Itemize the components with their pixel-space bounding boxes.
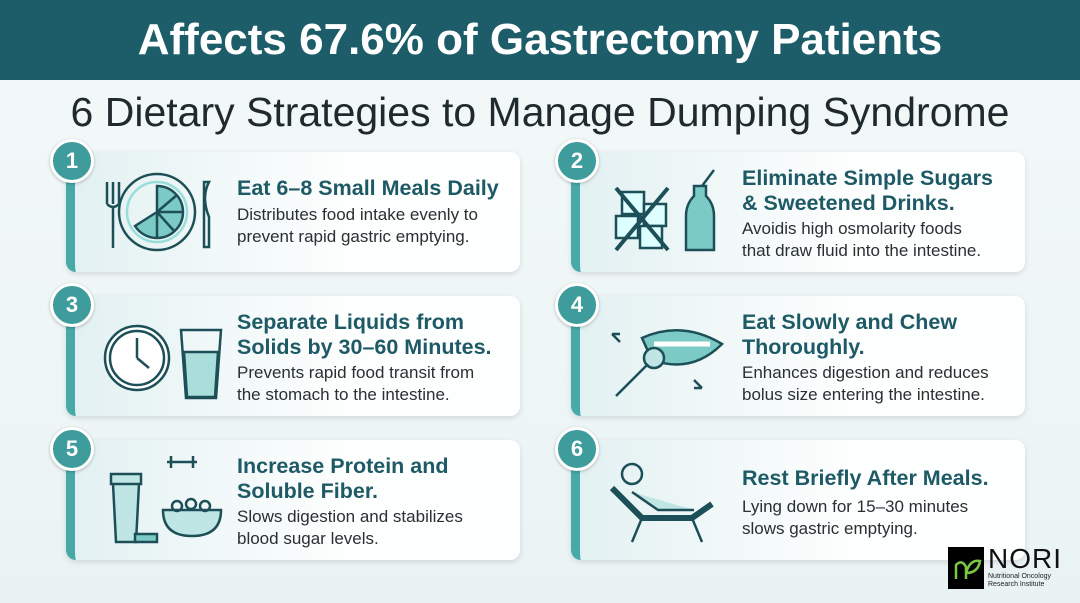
title: Eat Slowly and Chew <box>742 310 957 334</box>
icon: mouth chewing <box>611 329 724 397</box>
title: Increase Protein and <box>237 454 448 478</box>
body <box>237 205 478 246</box>
panel: card 1 <box>66 152 520 272</box>
logo: NORI: Nutritional Oncology <box>988 573 1051 580</box>
number 3: 3 <box>66 292 78 317</box>
body <box>742 219 981 260</box>
logo: NORI: NORI <box>988 543 1062 574</box>
panel: card 2 <box>571 152 1025 272</box>
body: the stomach to the intestine. <box>237 385 450 404</box>
body: that draw fluid into the intestine. <box>742 241 981 260</box>
body: Enhances digestion and reduces <box>742 363 989 382</box>
panel: card 4 <box>571 296 1025 416</box>
body: slows gastric emptying. <box>742 519 918 538</box>
panel: card 6 <box>571 440 1025 560</box>
body: Distributes food intake evenly to <box>237 205 478 224</box>
title <box>742 310 958 359</box>
number 2 <box>555 139 599 183</box>
title: Eliminate Simple Sugars <box>742 166 993 190</box>
icon: clock and glass <box>104 324 222 400</box>
number 6 <box>555 427 599 471</box>
title: Solids by 30–60 Minutes. <box>237 335 492 359</box>
body: prevent rapid gastric emptying. <box>237 227 469 246</box>
title <box>237 454 448 503</box>
icon: person resting <box>610 462 714 542</box>
body <box>742 497 968 538</box>
logo: NORI: Research Institute <box>988 581 1044 588</box>
panel: card 3 <box>66 296 520 416</box>
title <box>742 166 993 215</box>
icon: shaker and bowl <box>110 456 222 544</box>
number 3 <box>50 283 94 327</box>
icon: plate <box>106 172 211 252</box>
subtitle: 6 Dietary Strategies to Manage Dumping Syndrome <box>71 89 1009 135</box>
title: Soluble Fiber. <box>237 479 378 503</box>
header banner <box>0 0 1080 80</box>
title: Thoroughly. <box>742 335 865 359</box>
logo: NORI <box>948 543 1062 589</box>
title: Separate Liquids from <box>237 310 464 334</box>
body <box>742 363 989 404</box>
number 4 <box>555 283 599 327</box>
panel: card 5 <box>66 440 520 560</box>
number 1: 1 <box>66 148 78 173</box>
title: Eat 6–8 Small Meals Daily <box>237 176 499 200</box>
title <box>237 310 492 359</box>
number 5: 5 <box>66 436 78 461</box>
body: bolus size entering the intestine. <box>742 385 985 404</box>
body: Prevents rapid food transit from <box>237 363 474 382</box>
body: blood sugar levels. <box>237 529 379 548</box>
title: & Sweetened Drinks. <box>742 191 955 215</box>
number 5 <box>50 427 94 471</box>
number 6: 6 <box>571 436 583 461</box>
icon: sugar and soda <box>614 169 716 252</box>
title: Rest Briefly After Meals. <box>742 466 989 490</box>
header banner: Affects 67.6% of Gastrectomy Patients <box>138 15 942 64</box>
body <box>237 507 463 548</box>
number 2: 2 <box>571 148 583 173</box>
body: Avoidis high osmolarity foods <box>742 219 962 238</box>
body <box>237 363 474 404</box>
body: Lying down for 15–30 minutes <box>742 497 968 516</box>
body: Slows digestion and stabilizes <box>237 507 463 526</box>
number 1 <box>50 139 94 183</box>
number 4: 4 <box>571 292 583 317</box>
